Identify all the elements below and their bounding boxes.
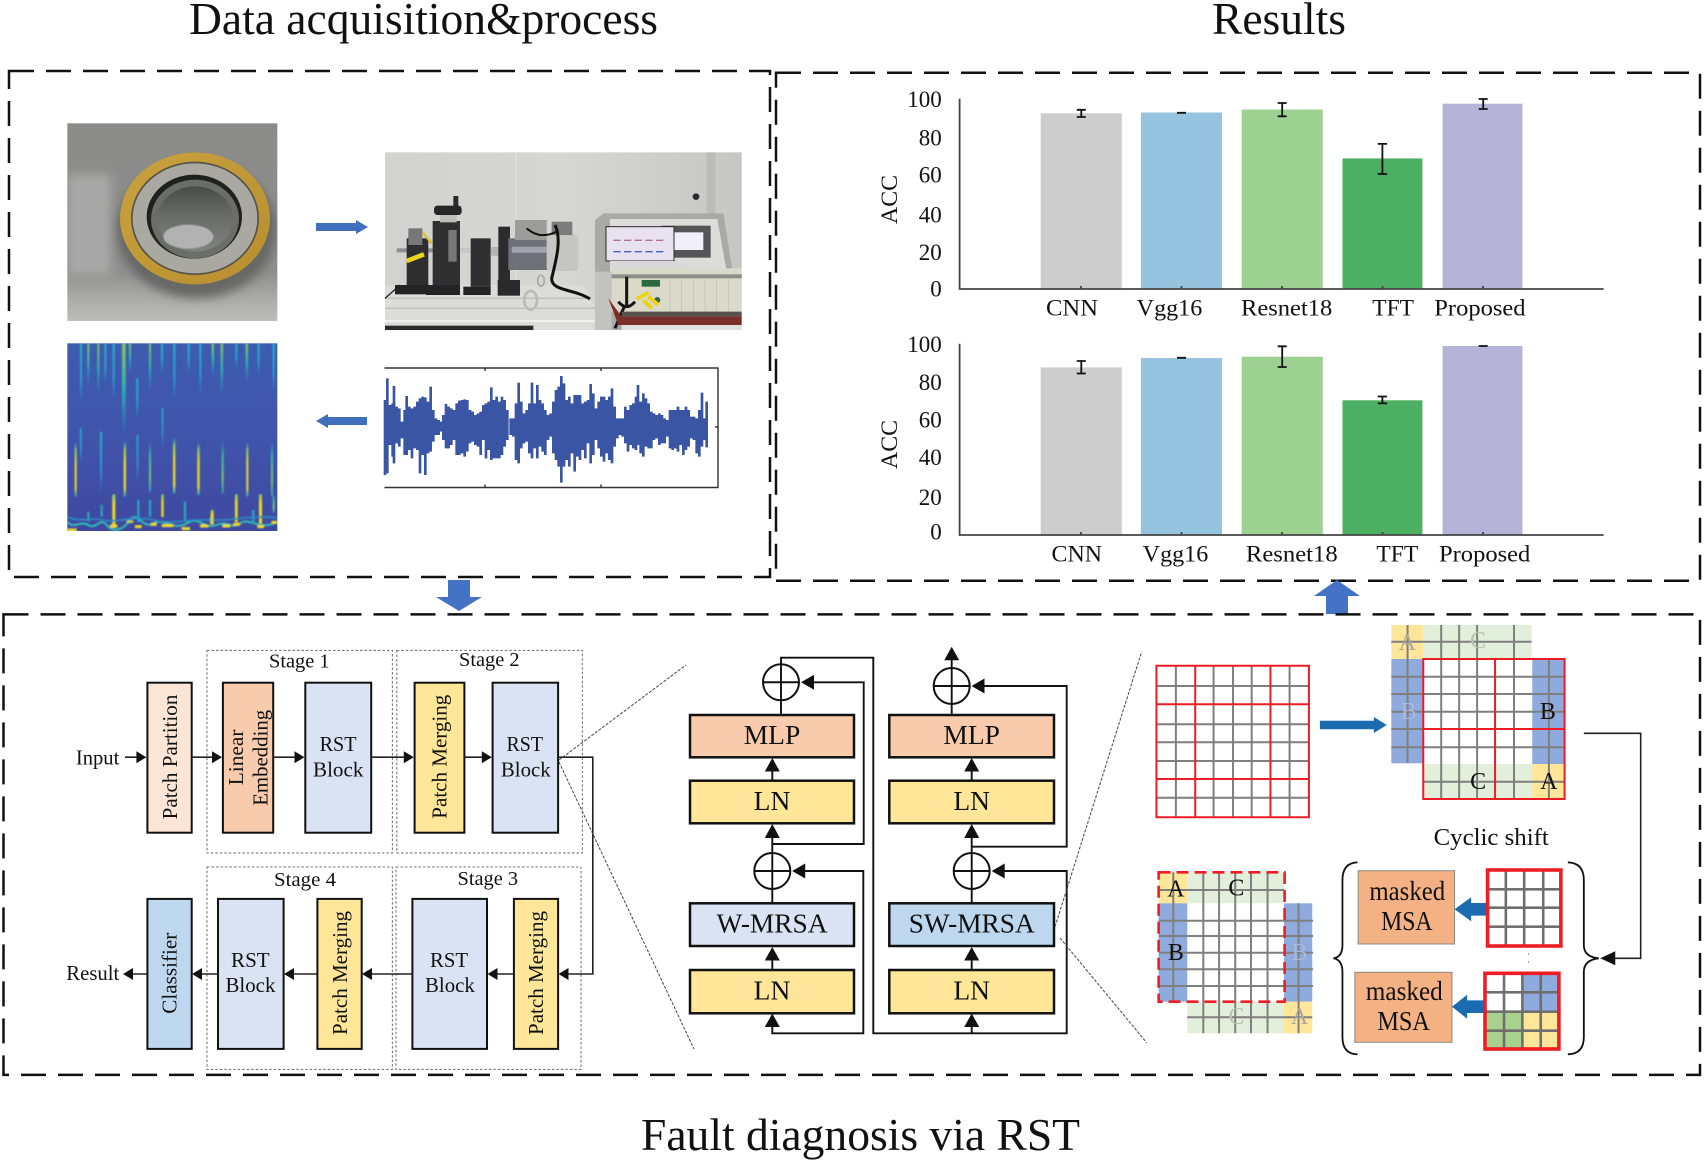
- chart: vibration signal: [384, 368, 718, 488]
- diagram: reverse cyclic shift grid: B: [1168, 940, 1184, 966]
- diagram: reverse cyclic shift grid: [1159, 872, 1313, 1033]
- block text: LN: [754, 974, 790, 1005]
- y axis labels bottom: 80: [919, 370, 942, 395]
- chart: accuracy bars top: [877, 87, 1604, 321]
- block text: MLP: [943, 719, 1000, 750]
- diagram: cyclic shift windows: [1156, 625, 1641, 1054]
- error bars top: [1077, 99, 1488, 174]
- grid: window bottom: [1485, 973, 1559, 1049]
- diagram: shifted window grid: C: [1470, 769, 1486, 795]
- x axis labels bottom: TFT: [1376, 541, 1418, 566]
- x axis labels bottom: Proposed: [1439, 541, 1531, 566]
- y axis labels top: 0: [930, 277, 942, 302]
- stage labels: Stage 1: [269, 651, 330, 673]
- block labels: Classifier: [158, 933, 182, 1014]
- x axis labels bottom: Vgg16: [1143, 541, 1208, 566]
- stage labels: [269, 649, 520, 891]
- chart: accuracy bars bottom: [877, 332, 1604, 566]
- x axis labels top: TFT: [1372, 296, 1414, 321]
- diagram: reverse cyclic shift grid: C: [1228, 1004, 1244, 1030]
- y axis labels bottom: 0: [930, 520, 942, 545]
- block labels: Embedding: [249, 709, 273, 806]
- block: masked MSA bottom: [1355, 972, 1452, 1042]
- diagram: shifted window grid: B: [1401, 699, 1417, 725]
- zoom guide lines right: [1055, 652, 1147, 1043]
- residual add nodes: [754, 664, 990, 889]
- label: cyclic shift: Cyclic shift: [1434, 824, 1549, 851]
- arrow: mask bottom: [1452, 995, 1484, 1019]
- y axis labels top: 100: [907, 87, 942, 112]
- diagram: pipeline blocks top row: [147, 683, 558, 833]
- block labels: RST: [430, 948, 468, 972]
- y axis labels bottom: 100: [907, 332, 942, 357]
- block labels: Block: [425, 973, 475, 997]
- diagram: shifted window grid: B: [1540, 699, 1556, 725]
- x axis labels bottom: [1052, 541, 1531, 566]
- blocks right column: [889, 715, 1054, 1013]
- x axis labels top: Vgg16: [1137, 296, 1202, 321]
- block text: LN: [754, 785, 790, 816]
- block labels: Input: [76, 746, 119, 770]
- diagram: reverse cyclic shift grid: A: [1167, 877, 1185, 903]
- block labels: [66, 694, 551, 1035]
- block: masked MSA top: MSA: [1381, 906, 1433, 936]
- photo: bearing: [67, 123, 277, 321]
- block labels: Result: [66, 961, 119, 985]
- y axis labels bottom: 60: [919, 408, 942, 432]
- y axis labels bottom: [907, 332, 942, 545]
- brace: right: [1568, 862, 1599, 1054]
- block: masked MSA top: masked: [1369, 876, 1446, 906]
- block labels: Patch Partition: [158, 694, 182, 819]
- block labels: Linear: [224, 729, 248, 785]
- diagram: shifted window grid: C: [1470, 628, 1486, 654]
- x axis labels top: Resnet18: [1241, 296, 1332, 321]
- arrow: signal to spectrogram: [316, 414, 367, 428]
- block labels: Block: [226, 973, 276, 997]
- x axis labels bottom: Resnet18: [1246, 541, 1338, 566]
- diagram: shifted window grid: A: [1399, 630, 1417, 656]
- diagram: reverse cyclic shift grid: A: [1291, 1004, 1309, 1030]
- block labels: RST: [320, 732, 357, 756]
- block labels: Patch Merging: [328, 911, 352, 1035]
- block labels: RST: [506, 732, 543, 756]
- y axis labels top: [907, 87, 942, 302]
- y axis title top: ACC: [877, 175, 902, 224]
- chart: wavelet spectrogram: [67, 343, 277, 531]
- stage labels: Stage 2: [459, 649, 520, 671]
- bars top: [1041, 104, 1522, 289]
- y axis title bottom: ACC: [877, 420, 902, 469]
- error bars bottom: [1077, 346, 1488, 403]
- zoom guide lines left: [559, 665, 694, 1049]
- brace: left: [1333, 862, 1357, 1054]
- panel: results: [776, 73, 1700, 581]
- axes top: [960, 99, 1604, 289]
- axes bottom: [960, 344, 1604, 535]
- arrow: model to results: [1314, 580, 1360, 614]
- block labels: Patch Merging: [524, 911, 548, 1035]
- block text: MLP: [744, 719, 800, 750]
- arrow: bearing to test rig: [316, 220, 368, 234]
- y axis labels top: 60: [919, 162, 942, 188]
- block text: LN: [953, 974, 990, 1005]
- x axis labels top: Proposed: [1434, 296, 1526, 321]
- y axis labels top: 20: [919, 240, 942, 265]
- pipeline connectors: [123, 751, 593, 980]
- y axis labels bottom: 20: [919, 485, 942, 510]
- diagram: pipeline blocks bottom row: [147, 899, 558, 1049]
- diagram: stage boxes: [207, 650, 582, 1069]
- diagram: reverse cyclic shift grid: B: [1292, 940, 1308, 966]
- bars bottom: [1041, 346, 1522, 535]
- y axis labels top: 40: [919, 203, 942, 228]
- x axis labels bottom: CNN: [1052, 541, 1102, 566]
- arrow: mask top: [1455, 897, 1486, 921]
- diagram: reverse cyclic shift grid: C: [1228, 876, 1244, 902]
- y axis labels bottom: 40: [919, 445, 942, 470]
- block: masked MSA bottom: masked: [1366, 976, 1443, 1006]
- arrow: window to shifted window: [1320, 717, 1387, 733]
- diagram: RST block detail: [690, 647, 1067, 1033]
- block labels: Block: [313, 757, 364, 781]
- photo: test rig: [385, 152, 742, 330]
- x axis labels top: CNN: [1046, 296, 1098, 321]
- block: masked MSA bottom: MSA: [1377, 1006, 1430, 1036]
- connectors: [765, 647, 1067, 1033]
- block text: SW-MRSA: [909, 908, 1035, 939]
- stage labels: Stage 3: [458, 868, 518, 890]
- panel: data acquisition and process: [9, 71, 770, 577]
- diagram: shifted window grid: A: [1540, 769, 1558, 795]
- diagram: window grid: [1156, 666, 1309, 817]
- stage labels: Stage 4: [274, 869, 336, 891]
- y axis labels top: 80: [919, 125, 942, 150]
- arrow: data to model: [436, 580, 482, 611]
- block text: LN: [953, 785, 990, 816]
- block labels: Patch Merging: [428, 694, 452, 819]
- block text: [716, 719, 1035, 1005]
- diagram: shifted window grid: [1391, 625, 1565, 799]
- block labels: RST: [231, 948, 270, 972]
- x axis labels top: [1046, 296, 1526, 321]
- block text: W-MRSA: [716, 908, 828, 939]
- title: fault diagnosis via RST: Fault diagnosis via RST: [641, 1110, 1080, 1160]
- grid: window top: [1488, 870, 1561, 946]
- block labels: Block: [501, 757, 551, 781]
- dots: [1528, 953, 1530, 963]
- connector: shifted grid to masked MSA: [1584, 733, 1641, 965]
- panel: fault diagnosis via RST: [4, 614, 1700, 1075]
- block: masked MSA top: [1358, 871, 1455, 944]
- blocks left column: [690, 715, 854, 1013]
